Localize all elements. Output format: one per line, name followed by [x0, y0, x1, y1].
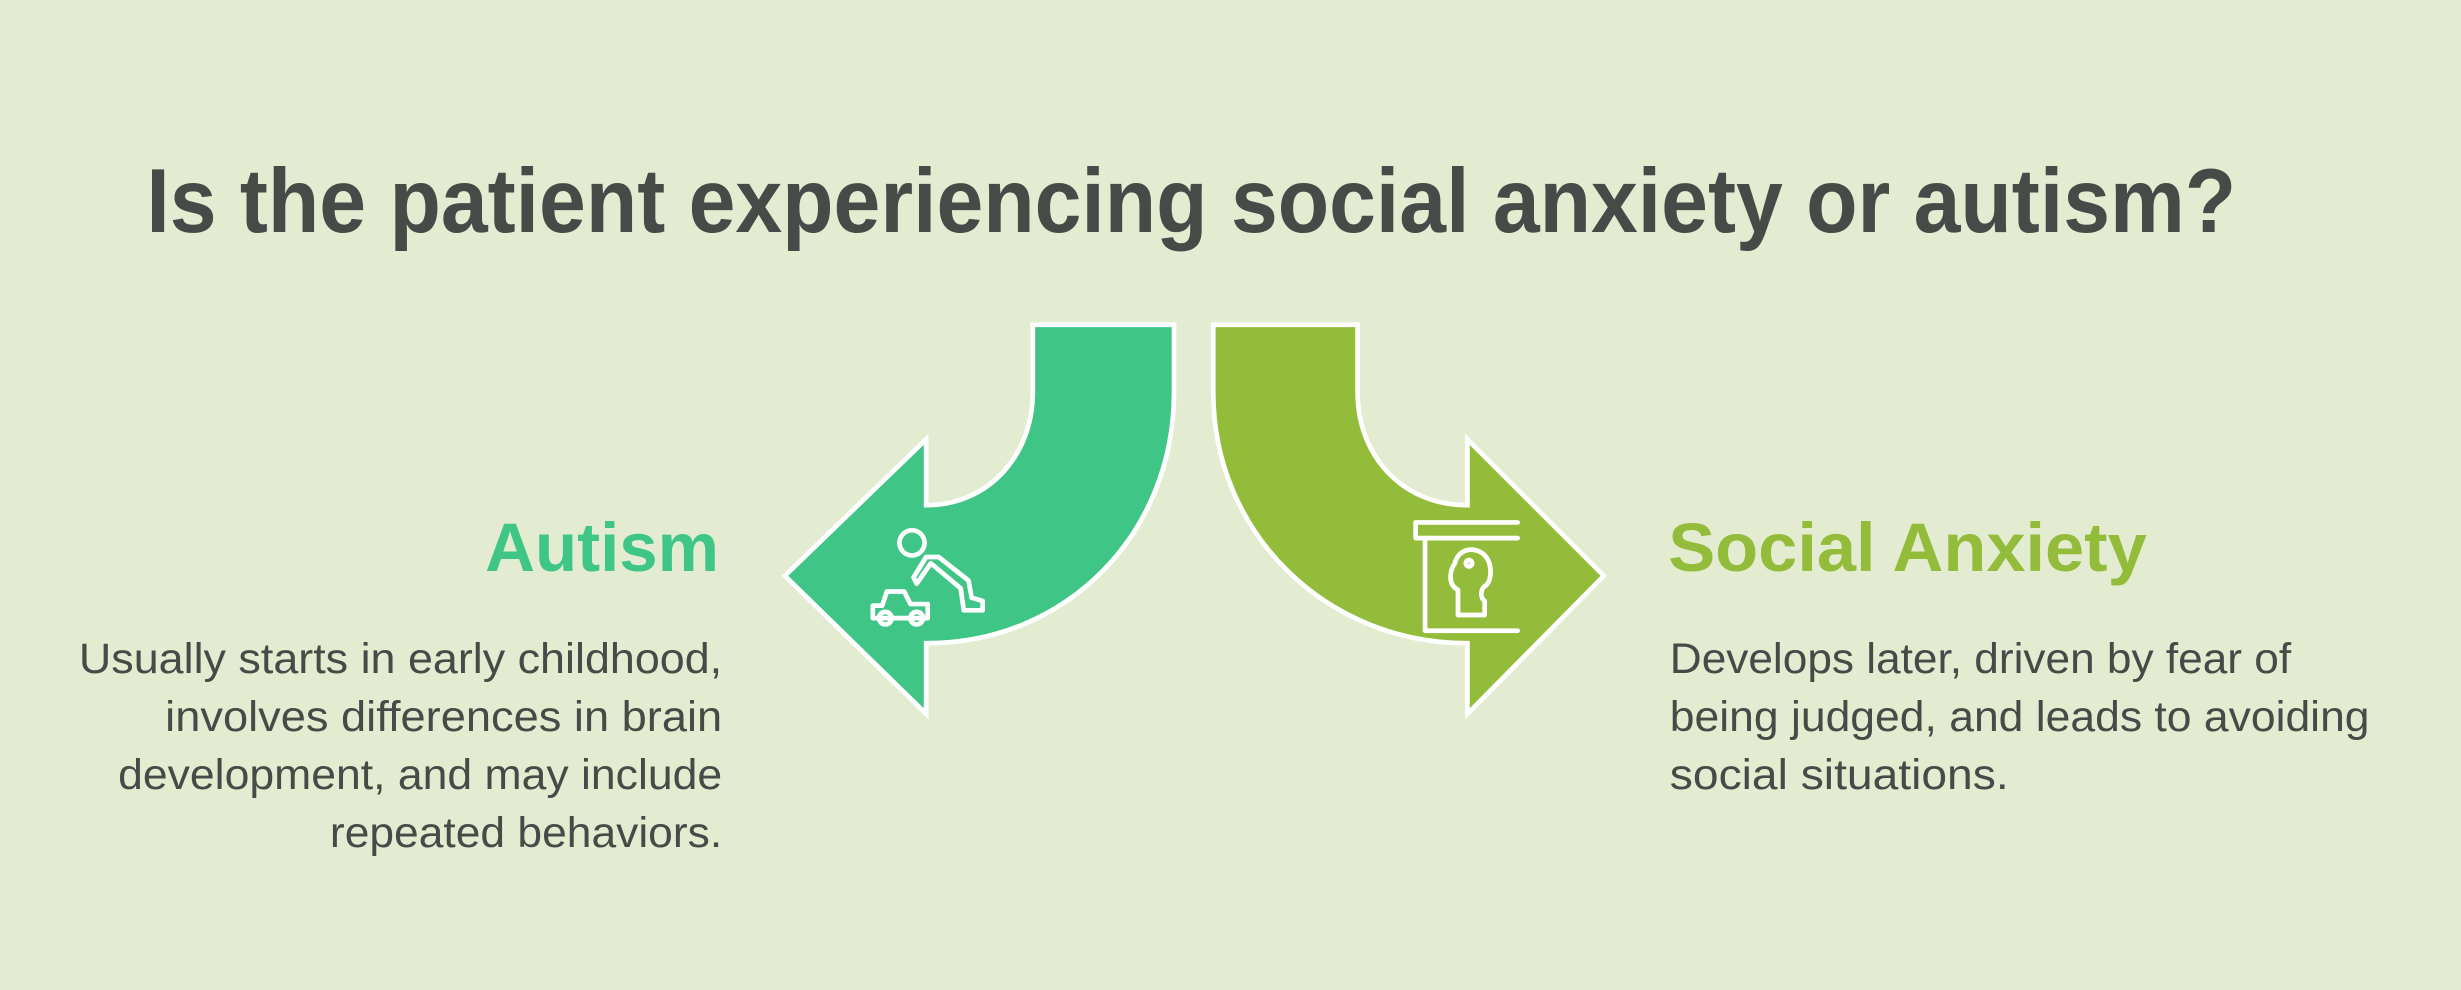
text block: social anxiety description: Develops later, driven by fear of: [1670, 635, 2291, 682]
heading: Autism: Autism: [485, 509, 719, 586]
arrow: social anxiety (right): [1213, 325, 1604, 714]
arrow: autism (left): [785, 325, 1174, 714]
text block: social anxiety description: social situations.: [1670, 751, 2009, 798]
text block: autism description: Usually starts in early childhood,: [79, 635, 722, 682]
text block: autism description: [79, 635, 722, 856]
text block: autism description: repeated behaviors.: [330, 809, 722, 856]
text block: social anxiety description: being judged, and leads to avoiding: [1670, 693, 2370, 740]
icon: person framed at podium: [1416, 522, 1518, 631]
text block: social anxiety description: [1670, 635, 2370, 798]
heading: Social Anxiety: Social Anxiety: [1668, 509, 2147, 586]
title: Is the patient experiencing social anxiety or autism?: [146, 151, 2236, 252]
text block: autism description: development, and may include: [118, 751, 722, 798]
text block: autism description: involves differences in brain: [165, 693, 722, 740]
icon: child playing with toy car: [873, 530, 983, 624]
